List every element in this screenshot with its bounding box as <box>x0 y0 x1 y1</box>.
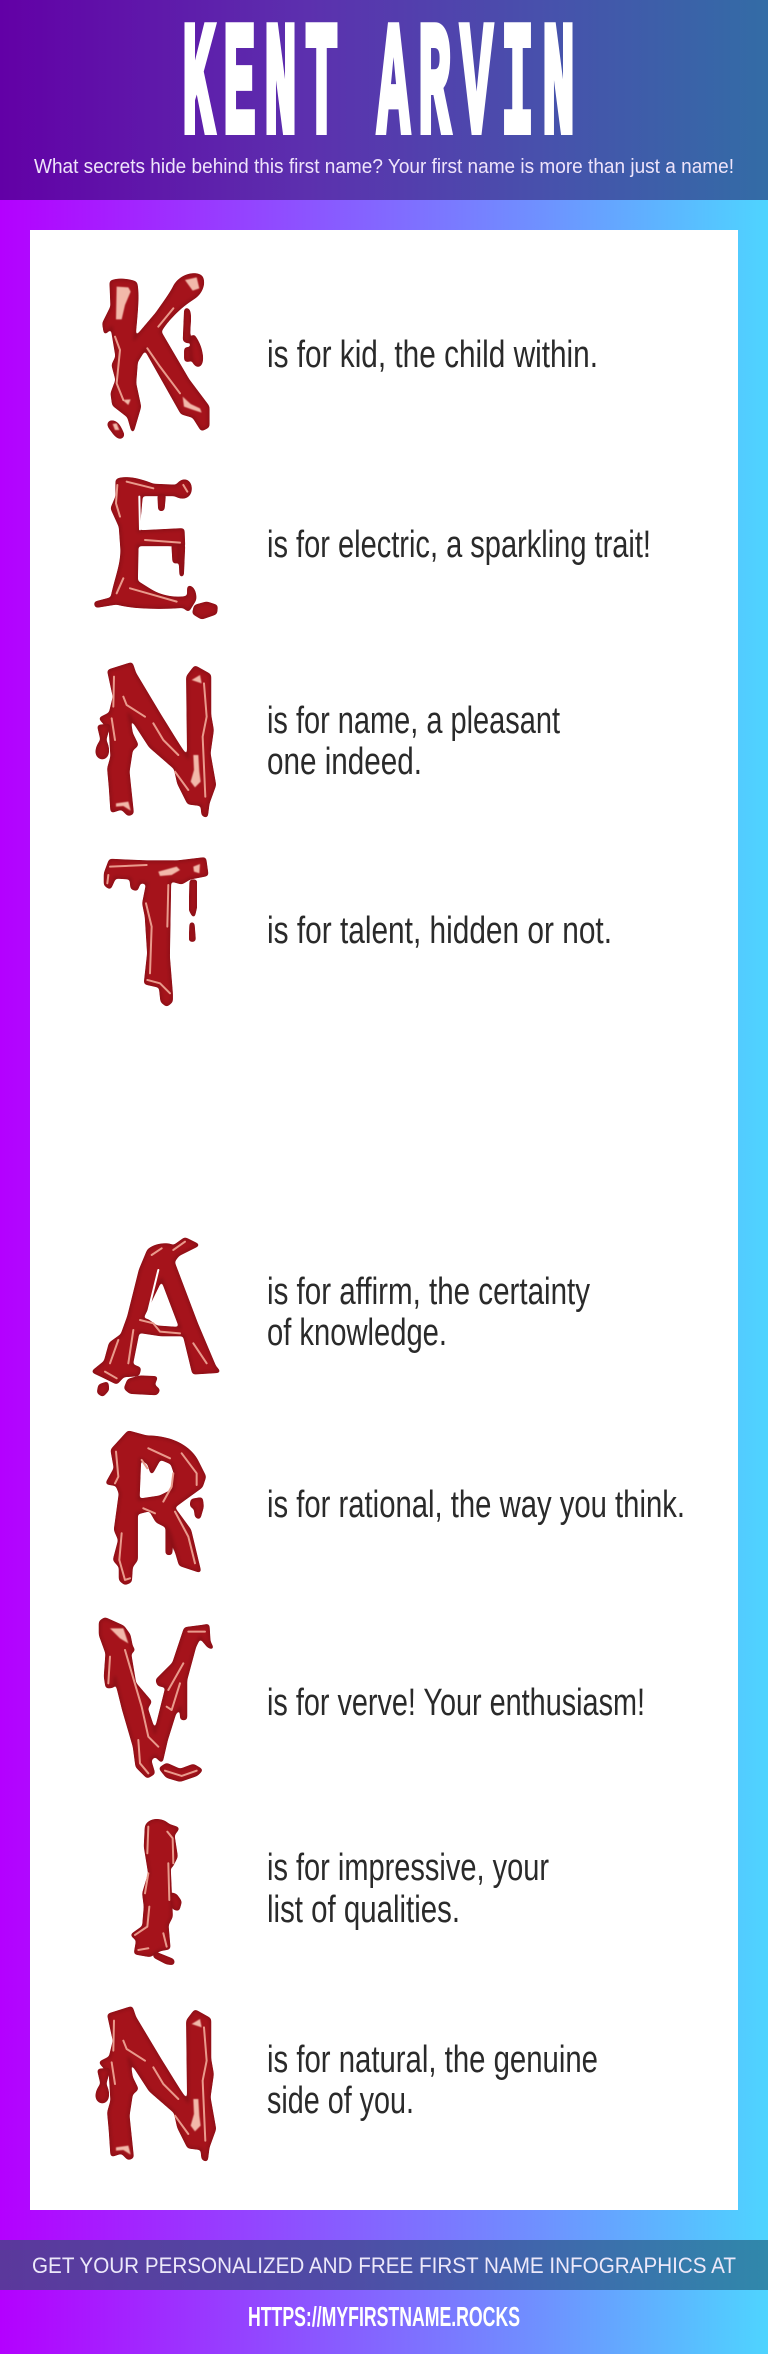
header band <box>0 0 768 200</box>
letter V <box>100 1618 213 1781</box>
text: I: is for impressive, your <box>267 1847 549 1889</box>
subtitle: What secrets hide behind this first name? Your first name is more than just a name! <box>34 155 734 178</box>
letter T <box>105 858 207 1006</box>
text: N (second) <box>267 2039 598 2122</box>
text: N <box>267 700 560 783</box>
footer url: HTTPS://MYFIRSTNAME.ROCKS <box>248 2301 520 2332</box>
text: E: is for electric, a sparkling trait! <box>267 524 651 566</box>
text: I second line: list of qualities. <box>267 1889 460 1931</box>
letter A <box>93 1238 219 1396</box>
text: T: is for talent, hidden or not. <box>267 910 612 952</box>
footer call to action: GET YOUR PERSONALIZED AND FREE FIRST NAME INFOGRAPHICS AT <box>32 2253 736 2278</box>
text: N: is for name, a pleasant <box>267 700 560 742</box>
text: A <box>267 1271 590 1354</box>
text: I <box>267 1847 549 1931</box>
text: N (second): is for natural, the genuine <box>267 2039 598 2081</box>
text: N second line (second): side of you. <box>267 2080 414 2122</box>
text: A: is for affirm, the certainty <box>267 1271 590 1313</box>
text: N second line: one indeed. <box>267 741 422 783</box>
footer band <box>0 2240 768 2290</box>
letter R <box>107 1432 205 1584</box>
letter K <box>103 274 208 438</box>
main white panel <box>30 230 738 2210</box>
text: A second line: of knowledge. <box>267 1312 447 1354</box>
letter E <box>95 478 217 618</box>
letter N <box>97 663 215 817</box>
letter I <box>132 1820 181 1964</box>
title: KENT ARVIN <box>182 0 575 179</box>
letter N (second) <box>97 2007 215 2161</box>
text: V: is for verve! Your enthusiasm! <box>267 1682 645 1724</box>
text: K: is for kid, the child within. <box>267 334 598 376</box>
